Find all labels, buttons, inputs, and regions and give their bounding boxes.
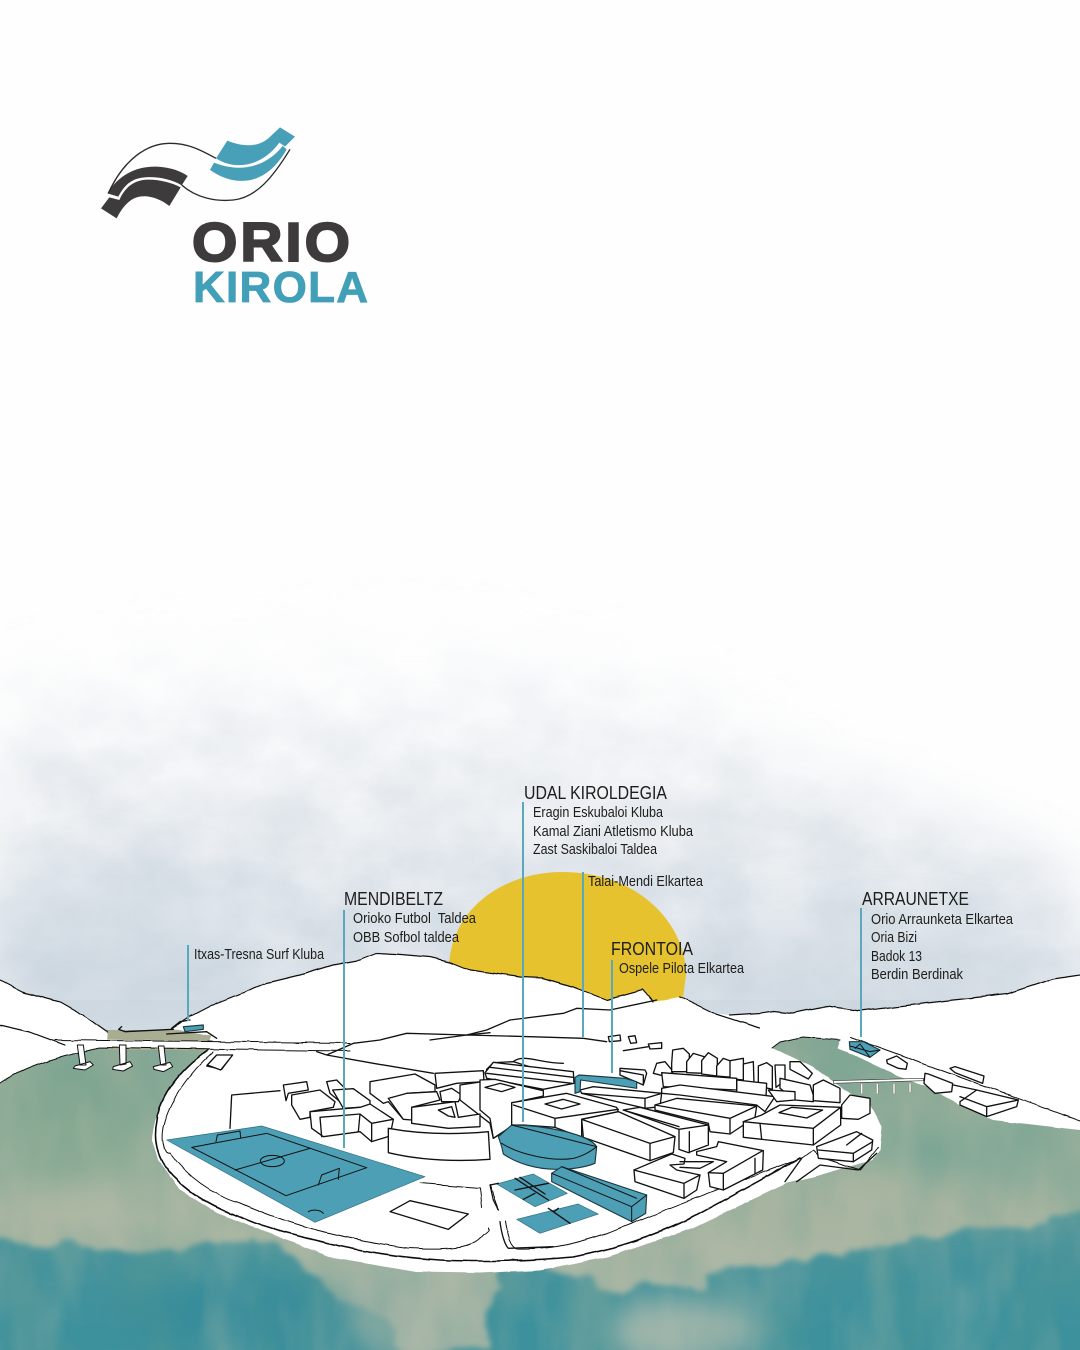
logo: Orio Kirola xyxy=(101,127,368,312)
buildings xyxy=(480,1048,877,1198)
tennis courts xyxy=(497,1174,567,1207)
label: Arraunetxe: Badok 13 xyxy=(871,949,922,965)
label: Udal Kiroldegia xyxy=(524,783,694,858)
yellow sun xyxy=(449,872,686,1005)
small inland lines xyxy=(490,1183,553,1248)
shore roads xyxy=(0,1037,1080,1261)
ridge huts xyxy=(430,1000,662,1051)
central land and hills xyxy=(152,953,1080,1273)
training field outline xyxy=(390,1201,468,1229)
label: Frontoia: FRONTOIA xyxy=(611,939,693,959)
old town houses xyxy=(653,1048,840,1103)
roundabout feature xyxy=(207,1055,232,1069)
label: Mendibeltz xyxy=(344,889,477,946)
khaki beach strip xyxy=(107,1030,215,1050)
rowing club building xyxy=(849,1042,880,1057)
label: Arraunetxe: ARRAUNETXE xyxy=(862,889,969,909)
buildings xyxy=(283,1062,540,1160)
label: Mendibeltz: OBB Sofbol taldea xyxy=(353,930,460,946)
bank houses xyxy=(887,1056,1018,1117)
map drawing left part xyxy=(167,1033,540,1229)
bridge piers left xyxy=(73,1020,233,1072)
sports hall stadium xyxy=(498,1125,597,1169)
teal water xyxy=(0,1210,1080,1350)
label: Arraunetxe: Orio Arraunketa Elkartea xyxy=(871,912,1014,928)
label: Udal Kiroldegia: UDAL KIROLDEGIA xyxy=(524,783,667,803)
covered gym xyxy=(552,1167,647,1222)
football pitch xyxy=(167,1126,425,1222)
label: Arraunetxe xyxy=(862,889,1014,983)
watercolor sea xyxy=(0,1030,1080,1350)
label: Itxas-Tresna: Itxas-Tresna Surf Kluba xyxy=(194,947,325,963)
logo word KIROLA: KIROLA xyxy=(193,263,368,312)
wall line xyxy=(230,1091,280,1128)
left hill xyxy=(0,970,107,1095)
label: Mendibeltz: Orioko Futbol Taldea xyxy=(353,911,477,927)
label: Mendibeltz: MENDIBELTZ xyxy=(344,889,443,909)
label: Udal Kiroldegia: Zast Saskibaloi Taldea xyxy=(533,842,658,858)
bridge deck xyxy=(55,1039,350,1050)
leader lines xyxy=(188,802,861,1148)
label: Udal Kiroldegia: Kamal Ziani Atletismo Kluba xyxy=(533,824,694,840)
hillside road lines xyxy=(317,1033,490,1073)
label: Frontoia xyxy=(611,939,745,977)
logo wave mark xyxy=(101,127,295,218)
surf club building xyxy=(119,1020,217,1038)
white land xyxy=(0,953,1080,1273)
watercolor sky xyxy=(0,624,1080,1100)
frontoia teal xyxy=(575,1075,637,1093)
label: Arraunetxe: Oria Bizi xyxy=(871,930,917,946)
label: Arraunetxe: Berdin Berdinak xyxy=(871,967,964,983)
label: Talai-Mendi: Talai-Mendi Elkartea xyxy=(588,874,704,890)
map drawing centre and right part xyxy=(480,1048,877,1248)
hill ridges xyxy=(0,953,1080,1045)
label: Frontoia: Ospele Pilota Elkartea xyxy=(619,961,745,977)
padel courts xyxy=(517,1204,598,1233)
right bridge xyxy=(833,1078,923,1093)
right bank xyxy=(833,1042,1018,1117)
logo word ORIO: ORIO xyxy=(192,212,350,274)
label: Udal Kiroldegia: Eragin Eskubaloi Kluba xyxy=(533,805,664,821)
